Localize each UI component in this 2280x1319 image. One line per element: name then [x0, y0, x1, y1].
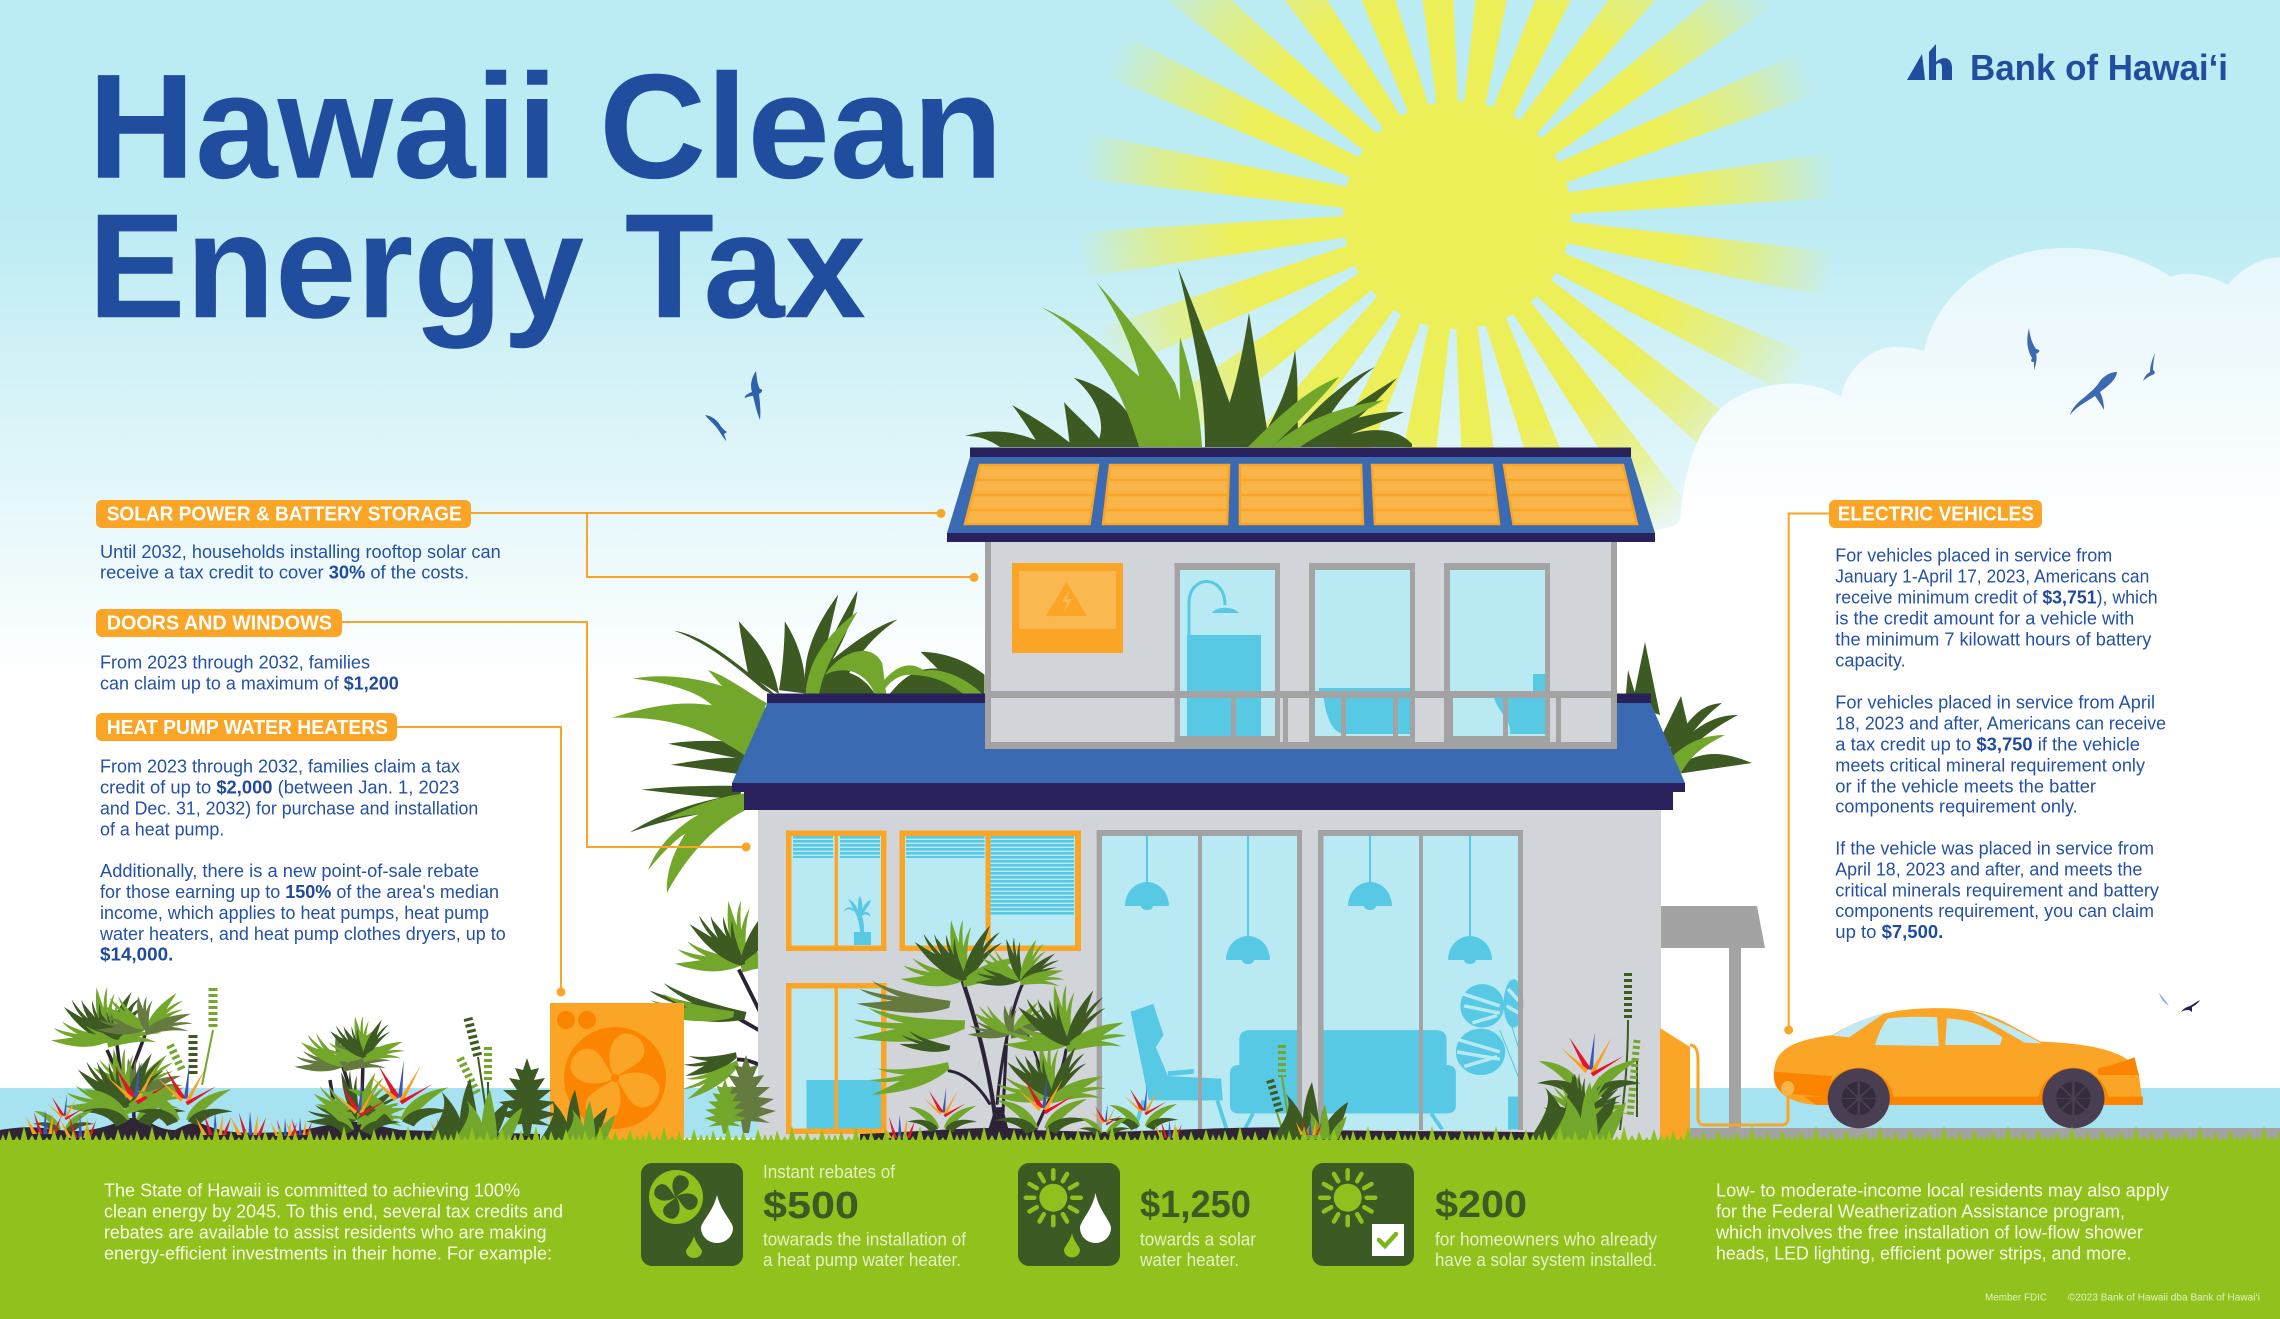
window B: [900, 830, 1081, 951]
footer legal text: ©2023 Bank of Hawaii dba Bank of Hawai‘i: [2068, 1293, 2260, 1304]
door frames: [1097, 830, 1523, 1130]
body text: can claim up to a maximum of $1,200: [100, 672, 399, 693]
crown A: [900, 919, 1025, 993]
body text: [1835, 545, 2166, 942]
footer legal text: [1985, 1293, 2260, 1304]
rebate: $500: [763, 1162, 967, 1270]
wall: [758, 808, 1661, 1140]
solar panels: [965, 465, 1637, 524]
body text: capacity.: [1835, 650, 1906, 671]
large left fronds: [853, 979, 965, 1096]
rebate: $200: $200: [1435, 1184, 1527, 1226]
rebate: $500: towarads the installation of: [763, 1230, 967, 1250]
rebate: $200: for homeowners who already: [1435, 1230, 1657, 1250]
panel: heat pump water heaters: [96, 713, 506, 965]
plant behind lower roof, right: [1625, 642, 1752, 775]
bathtub: [1319, 688, 1410, 734]
text block: state intro: energy-efficient investments in their home. For example:: [104, 1243, 552, 1263]
body text: water heaters, and heat pump clothes dryers, up to: [99, 923, 506, 944]
body text: January 1-April 17, 2023, Americans can: [1835, 566, 2149, 587]
body text: $14,000.: [100, 944, 173, 965]
text block: weatherization program: [1715, 1181, 2169, 1263]
body text: 18, 2023 and after, Americans can receive: [1835, 712, 2166, 733]
text block: weatherization program: for the Federal Weatherization Assistance program,: [1716, 1202, 2125, 1222]
body text: meets critical mineral requirement only: [1835, 754, 2146, 775]
logo: Bank of Hawai'i: Bank of Hawai‘i: [1970, 47, 2228, 88]
heat pump unit: [550, 1003, 684, 1140]
body text: critical minerals requirement and battery: [1835, 880, 2160, 901]
grass edge: [0, 1122, 2280, 1142]
icon: sun and water drops: [1018, 1163, 1120, 1266]
heading tag: SOLAR POWER & BATTERY STORAGE: [107, 504, 462, 526]
body text: [99, 755, 506, 965]
body text: receive minimum credit of $3,751), which: [1835, 587, 2158, 608]
foreground garden plant, left 2: [271, 1016, 457, 1136]
body text: a tax credit up to $3,750 if the vehicle: [1835, 733, 2140, 754]
body text: for those earning up to 150% of the area's median: [100, 881, 499, 902]
crown B: [975, 936, 1065, 989]
panel: doors and windows: [96, 609, 399, 693]
body text: components requirement, you can claim: [1835, 900, 2154, 921]
balcony rail: [985, 542, 1617, 749]
connector: EV tag to car: [1785, 514, 1829, 1034]
plant behind house, left lower: [645, 900, 807, 1100]
plant behind top roof: [965, 268, 1412, 447]
connector: doors tag to windows: [342, 622, 750, 850]
chair, sofa and monstera: [1131, 979, 1523, 1129]
body text: up to $7,500.: [1835, 921, 1943, 942]
body text: the minimum 7 kilowatt hours of battery: [1835, 629, 2152, 650]
body text: April 18, 2023 and after, and meets the: [1835, 859, 2142, 880]
connector: solar tag to roof and battery: [470, 510, 978, 581]
electric car: [1774, 1008, 2143, 1128]
birds in the cloud: [2027, 328, 2155, 415]
body text: credit of up to $2,000 (between Jan. 1, 2023: [100, 776, 459, 797]
icon: sun and check mark: [1312, 1163, 1414, 1266]
lower roof: [732, 694, 1685, 810]
road: [1680, 1128, 2280, 1142]
connector: heat pump tag to unit: [397, 727, 564, 996]
carport: [1660, 906, 1765, 1130]
electrical battery box: [1012, 563, 1123, 653]
rebate: $200: [1435, 1184, 1657, 1270]
body text: Additionally, there is a new point-of-sale rebate: [100, 860, 479, 881]
foreground plant in front of house: [853, 919, 1182, 1138]
foreground garden plant, left 1: [26, 987, 312, 1138]
wall: [985, 542, 1617, 749]
shower: [1187, 581, 1261, 736]
body text: or if the vehicle meets the batter: [1835, 775, 2096, 796]
heading tag: HEAT PUMP WATER HEATERS: [107, 717, 388, 739]
rebate: $500: $500: [763, 1185, 859, 1227]
toilet: [1494, 674, 1545, 734]
cloud: [1610, 248, 2280, 720]
green ground band: [0, 1140, 2280, 1319]
heading tag: DOORS AND WINDOWS: [107, 613, 332, 635]
body text: From 2023 through 2032, families: [100, 651, 370, 672]
house: upper floor: [985, 542, 1617, 749]
plant behind lower roof, left: [613, 591, 985, 893]
body text: If the vehicle was placed in service from: [1835, 838, 2154, 859]
sun with rays: [1077, 0, 1837, 596]
rebate: $1,250: water heater.: [1139, 1250, 1239, 1270]
title: Hawaii Clean: [88, 43, 1003, 210]
rebate: $500: a heat pump water heater.: [763, 1250, 961, 1270]
flower stalks, fern and grass clump beside heat pump: [426, 1018, 615, 1142]
rebate: $500: Instant rebates of: [763, 1162, 896, 1182]
rebate: $1,250: $1,250: [1140, 1184, 1251, 1226]
icon: fan and water drops: [641, 1163, 743, 1266]
text block: state intro: The State of Hawaii is committed to achieving 100%: [104, 1181, 520, 1201]
text block: state intro: clean energy by 2045. To this end, several tax credits and: [104, 1202, 563, 1222]
ground soil: [0, 1118, 1580, 1142]
rebate: $1,250: towards a solar: [1140, 1230, 1256, 1250]
body text: receive a tax credit to cover 30% of the costs.: [100, 562, 469, 582]
panel: electric vehicles: [1829, 500, 2166, 942]
text block: weatherization program: Low- to moderate-income local residents may also apply: [1716, 1181, 2169, 1201]
flower stalks, left 1: [170, 988, 213, 1085]
rebate: $1,250: [1139, 1184, 1256, 1270]
small birds over ocean: [2159, 993, 2200, 1012]
body text: [100, 541, 501, 582]
ferns at house corner: [704, 1055, 776, 1134]
rebate: $200: have a solar system installed.: [1435, 1250, 1657, 1270]
body text: and Dec. 31, 2032) for purchase and installation: [100, 797, 478, 818]
body text: [100, 651, 399, 693]
body text: income, which applies to heat pumps, heat pump: [100, 902, 489, 923]
panel: solar power and battery storage: [96, 500, 501, 582]
EV charger with cable: [1660, 1028, 1788, 1140]
house: lower floor: [758, 808, 1661, 1140]
footer legal text: Member FDIC: [1985, 1293, 2047, 1304]
text block: weatherization program: which involves the free installation of low-flow shower: [1715, 1223, 2143, 1243]
body text: of a heat pump.: [100, 818, 224, 839]
body text: is the credit amount for a vehicle with: [1835, 608, 2134, 629]
window C: [786, 983, 886, 1134]
ocean: [0, 1088, 2280, 1138]
title: [88, 43, 1003, 349]
body text: For vehicles placed in service from April: [1835, 691, 2155, 712]
garden plants, center and right: [1270, 973, 1641, 1140]
body text: From 2023 through 2032, families claim a tax: [100, 755, 461, 776]
heading tag: ELECTRIC VEHICLES: [1838, 504, 2034, 526]
text block: state intro: rebates are available to assist residents who are making: [104, 1223, 546, 1243]
title: Energy Tax: [88, 182, 866, 349]
pendant lamps: [1125, 836, 1492, 964]
top roof with solar panels: [947, 448, 1655, 542]
text block: state intro: [104, 1181, 563, 1263]
window A: [786, 830, 886, 951]
body text: components requirement only.: [1835, 796, 2078, 817]
upper windows: [1174, 563, 1550, 742]
body text: Until 2032, households installing rooftop solar can: [100, 541, 501, 562]
birds left of house: [705, 371, 762, 441]
sliding doors glass: [1097, 830, 1523, 1130]
text block: weatherization program: heads, LED lighting, efficient power strips, and more.: [1716, 1243, 2132, 1263]
body text: For vehicles placed in service from: [1835, 545, 2112, 566]
